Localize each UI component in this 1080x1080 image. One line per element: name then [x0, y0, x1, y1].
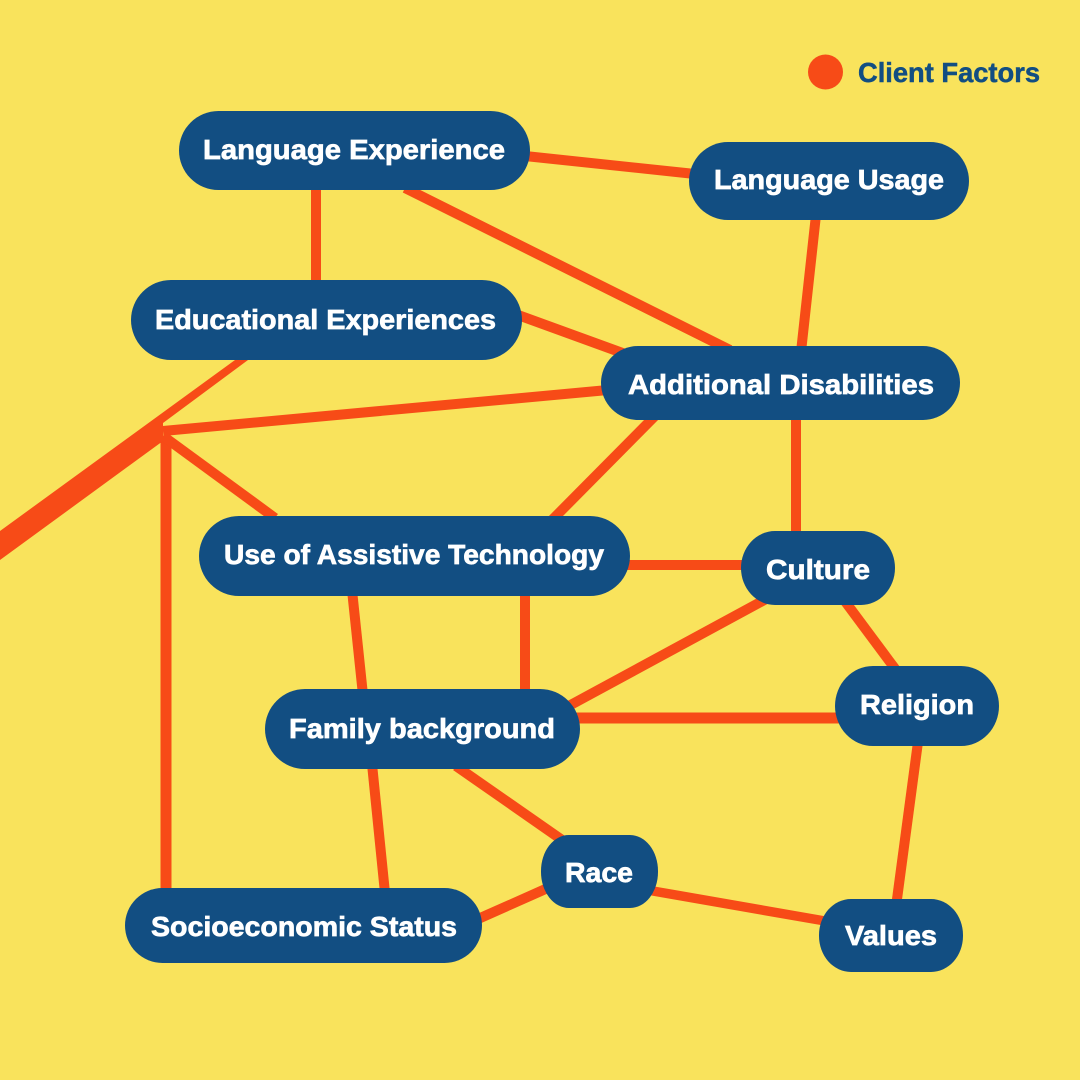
node: race: [541, 835, 658, 908]
node: family background: [265, 689, 580, 769]
node: culture: Culture: [766, 554, 870, 585]
node: values: [819, 899, 963, 972]
node: culture: [741, 531, 895, 605]
node: language usage: [689, 142, 969, 220]
node: religion: [835, 666, 999, 746]
node: language experience: Language Experience: [203, 134, 505, 165]
node: race: Race: [565, 857, 633, 888]
node: socioeconomic status: [125, 888, 482, 963]
node: educational experiences: Educational Experiences: [155, 304, 496, 335]
legend: client factors: [808, 54, 1040, 90]
node: socioeconomic status: Socioeconomic Status: [151, 911, 457, 942]
node: educational experiences: [131, 280, 522, 360]
legend: client factors: Client Factors: [858, 57, 1040, 88]
connection lines: [0, 156, 918, 921]
node: use of assistive technology: Use of Assistive Technology: [224, 539, 604, 570]
node: language experience: [179, 111, 530, 190]
node: additional disabilities: [601, 346, 960, 420]
node: use of assistive technology: [199, 516, 630, 596]
node: language usage: Language Usage: [714, 164, 944, 195]
node: additional disabilities: Additional Disabilities: [628, 369, 934, 400]
node: values: Values: [845, 920, 937, 951]
node: family background: Family background: [289, 713, 555, 744]
node: religion: Religion: [860, 689, 974, 720]
